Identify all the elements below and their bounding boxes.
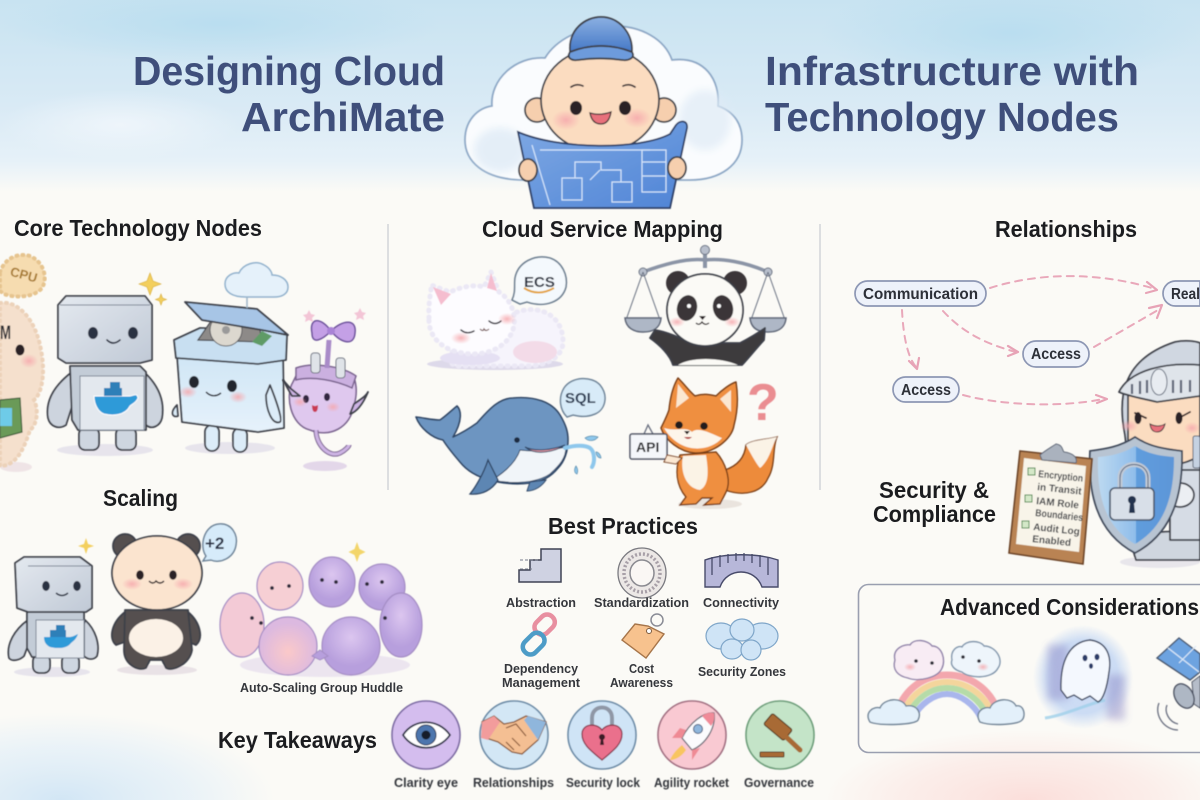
clipboard checklist: Boundaries — [1035, 508, 1084, 524]
heading: security and compliance: Security & — [879, 477, 989, 503]
icon: satellite — [1157, 638, 1200, 730]
icon: security shield — [1090, 437, 1182, 553]
title left: ArchiMate — [241, 94, 445, 140]
best practice: connectivity — [703, 553, 780, 610]
character: storage bin with disk — [173, 263, 288, 454]
heading: core technology nodes: Core Technology Nodes — [14, 215, 262, 241]
character: fox with API sign — [630, 374, 779, 509]
best practice: standardization: Standardization — [594, 595, 689, 610]
takeaway: agility rocket: Agility rocket — [654, 775, 730, 790]
takeaway: clarity eye: Clarity eye — [394, 775, 458, 790]
best practice: abstraction — [506, 549, 576, 610]
best practice: cost awareness: Cost — [629, 661, 655, 676]
clipboard checklist: IAM Role — [1036, 496, 1080, 512]
best practice: dependency management: Dependency — [504, 661, 579, 676]
character: CPU bear: CPU — [9, 264, 39, 286]
best practice: dependency management: Management — [502, 675, 581, 690]
icon: API sign — [630, 425, 667, 459]
mascot: baby with cap and blueprint on cloud — [465, 17, 742, 208]
clipboard checklist: Enabled — [1032, 534, 1072, 549]
bubble: +2: +2 — [205, 534, 224, 553]
takeaway: relationships handshake — [473, 701, 554, 790]
arrow: communication to lower access — [902, 310, 919, 369]
character: server robot with docker whale — [47, 273, 166, 456]
character: knight with shield — [1090, 341, 1200, 568]
arrow: communication to access — [943, 311, 1018, 356]
icon: blue cap — [570, 17, 632, 52]
best practice: security zones — [698, 619, 786, 679]
pill: realization (cropped at page edge) — [1163, 281, 1200, 306]
character: CPU bear: M — [0, 323, 11, 344]
icon: docker whale — [94, 382, 138, 415]
best practice: cost awareness — [610, 614, 673, 690]
takeaway: governance gavel: Governance — [744, 775, 814, 790]
character: fluffy cat ECS — [427, 257, 566, 370]
bubble: SQL: SQL — [565, 390, 596, 407]
clipboard checklist — [1009, 444, 1092, 564]
arrow: access to realization — [1094, 305, 1162, 347]
heading: best practices: Best Practices — [548, 513, 698, 539]
bubble: SQL — [560, 379, 605, 417]
takeaway: relationships handshake: Relationships — [473, 775, 554, 790]
takeaway: security lock — [566, 701, 641, 790]
arrow: communication to realization — [990, 276, 1157, 293]
pill: communication: Communication — [863, 286, 978, 303]
character: panda with scales — [625, 246, 786, 365]
heading: cloud service mapping: Cloud Service Mapping — [482, 216, 723, 242]
bubble: ECS: ECS — [524, 274, 555, 291]
clipboard checklist: Audit Log — [1033, 522, 1080, 538]
heading: relationships: Relationships — [995, 216, 1137, 242]
best practice: connectivity: Connectivity — [703, 595, 780, 610]
pill: communication — [855, 281, 986, 306]
icon: water spout — [565, 446, 594, 467]
divider — [388, 224, 820, 490]
best practice: standardization — [594, 548, 689, 610]
clipboard checklist: Encryption — [1038, 469, 1084, 485]
icon: docker whale — [44, 634, 78, 648]
character: scaling panda — [112, 524, 236, 675]
takeaway: security lock: Security lock — [566, 775, 641, 790]
title right — [765, 48, 1139, 140]
character: scaling robot — [8, 538, 98, 677]
best practice: abstraction: Abstraction — [506, 595, 576, 610]
panel: advanced considerations — [858, 584, 1200, 752]
bubble: +2 — [203, 524, 236, 561]
heading: security and compliance — [873, 477, 996, 527]
pill: access upper — [1023, 341, 1089, 367]
best practice: dependency management — [502, 612, 581, 690]
icon: question mark: ? — [747, 374, 779, 432]
character: purple plug — [283, 308, 368, 471]
character: CPU bear — [0, 255, 45, 472]
pill: access upper: Access — [1031, 346, 1081, 363]
arrow: access to knight — [963, 395, 1107, 404]
takeaway: clarity eye — [392, 701, 460, 790]
character group: auto-scaling huddle — [220, 542, 422, 677]
title left: Designing Cloud — [133, 48, 445, 94]
title right: Technology Nodes — [765, 94, 1119, 140]
caption: auto-scaling group huddle: Auto-Scaling Group Huddle — [240, 680, 403, 695]
clipboard checklist: in Transit — [1037, 482, 1083, 498]
heading: key takeaways: Key Takeaways — [218, 727, 377, 753]
icon: small cloud — [225, 263, 288, 297]
best practice: cost awareness: Awareness — [610, 675, 673, 690]
heading: scaling: Scaling — [103, 485, 178, 511]
icon: clouds on rainbow — [868, 641, 1024, 724]
icon: API sign: API — [636, 439, 659, 455]
pill: access lower — [893, 377, 959, 402]
heading: security and compliance: Compliance — [873, 501, 996, 527]
best practice: security zones: Security Zones — [698, 664, 786, 679]
blueprint — [518, 122, 687, 208]
title right: Infrastructure with — [765, 48, 1139, 94]
takeaway: agility rocket — [654, 701, 730, 790]
pill: access lower: Access — [901, 382, 951, 399]
icon: padlock — [1110, 464, 1154, 520]
icon: serverless ghost — [1033, 625, 1133, 729]
takeaway: governance gavel — [744, 701, 814, 790]
icon: sparkles — [139, 273, 166, 305]
character: blue whale SQL — [416, 379, 605, 494]
title left — [133, 48, 445, 140]
relationship diagram — [855, 276, 1200, 404]
